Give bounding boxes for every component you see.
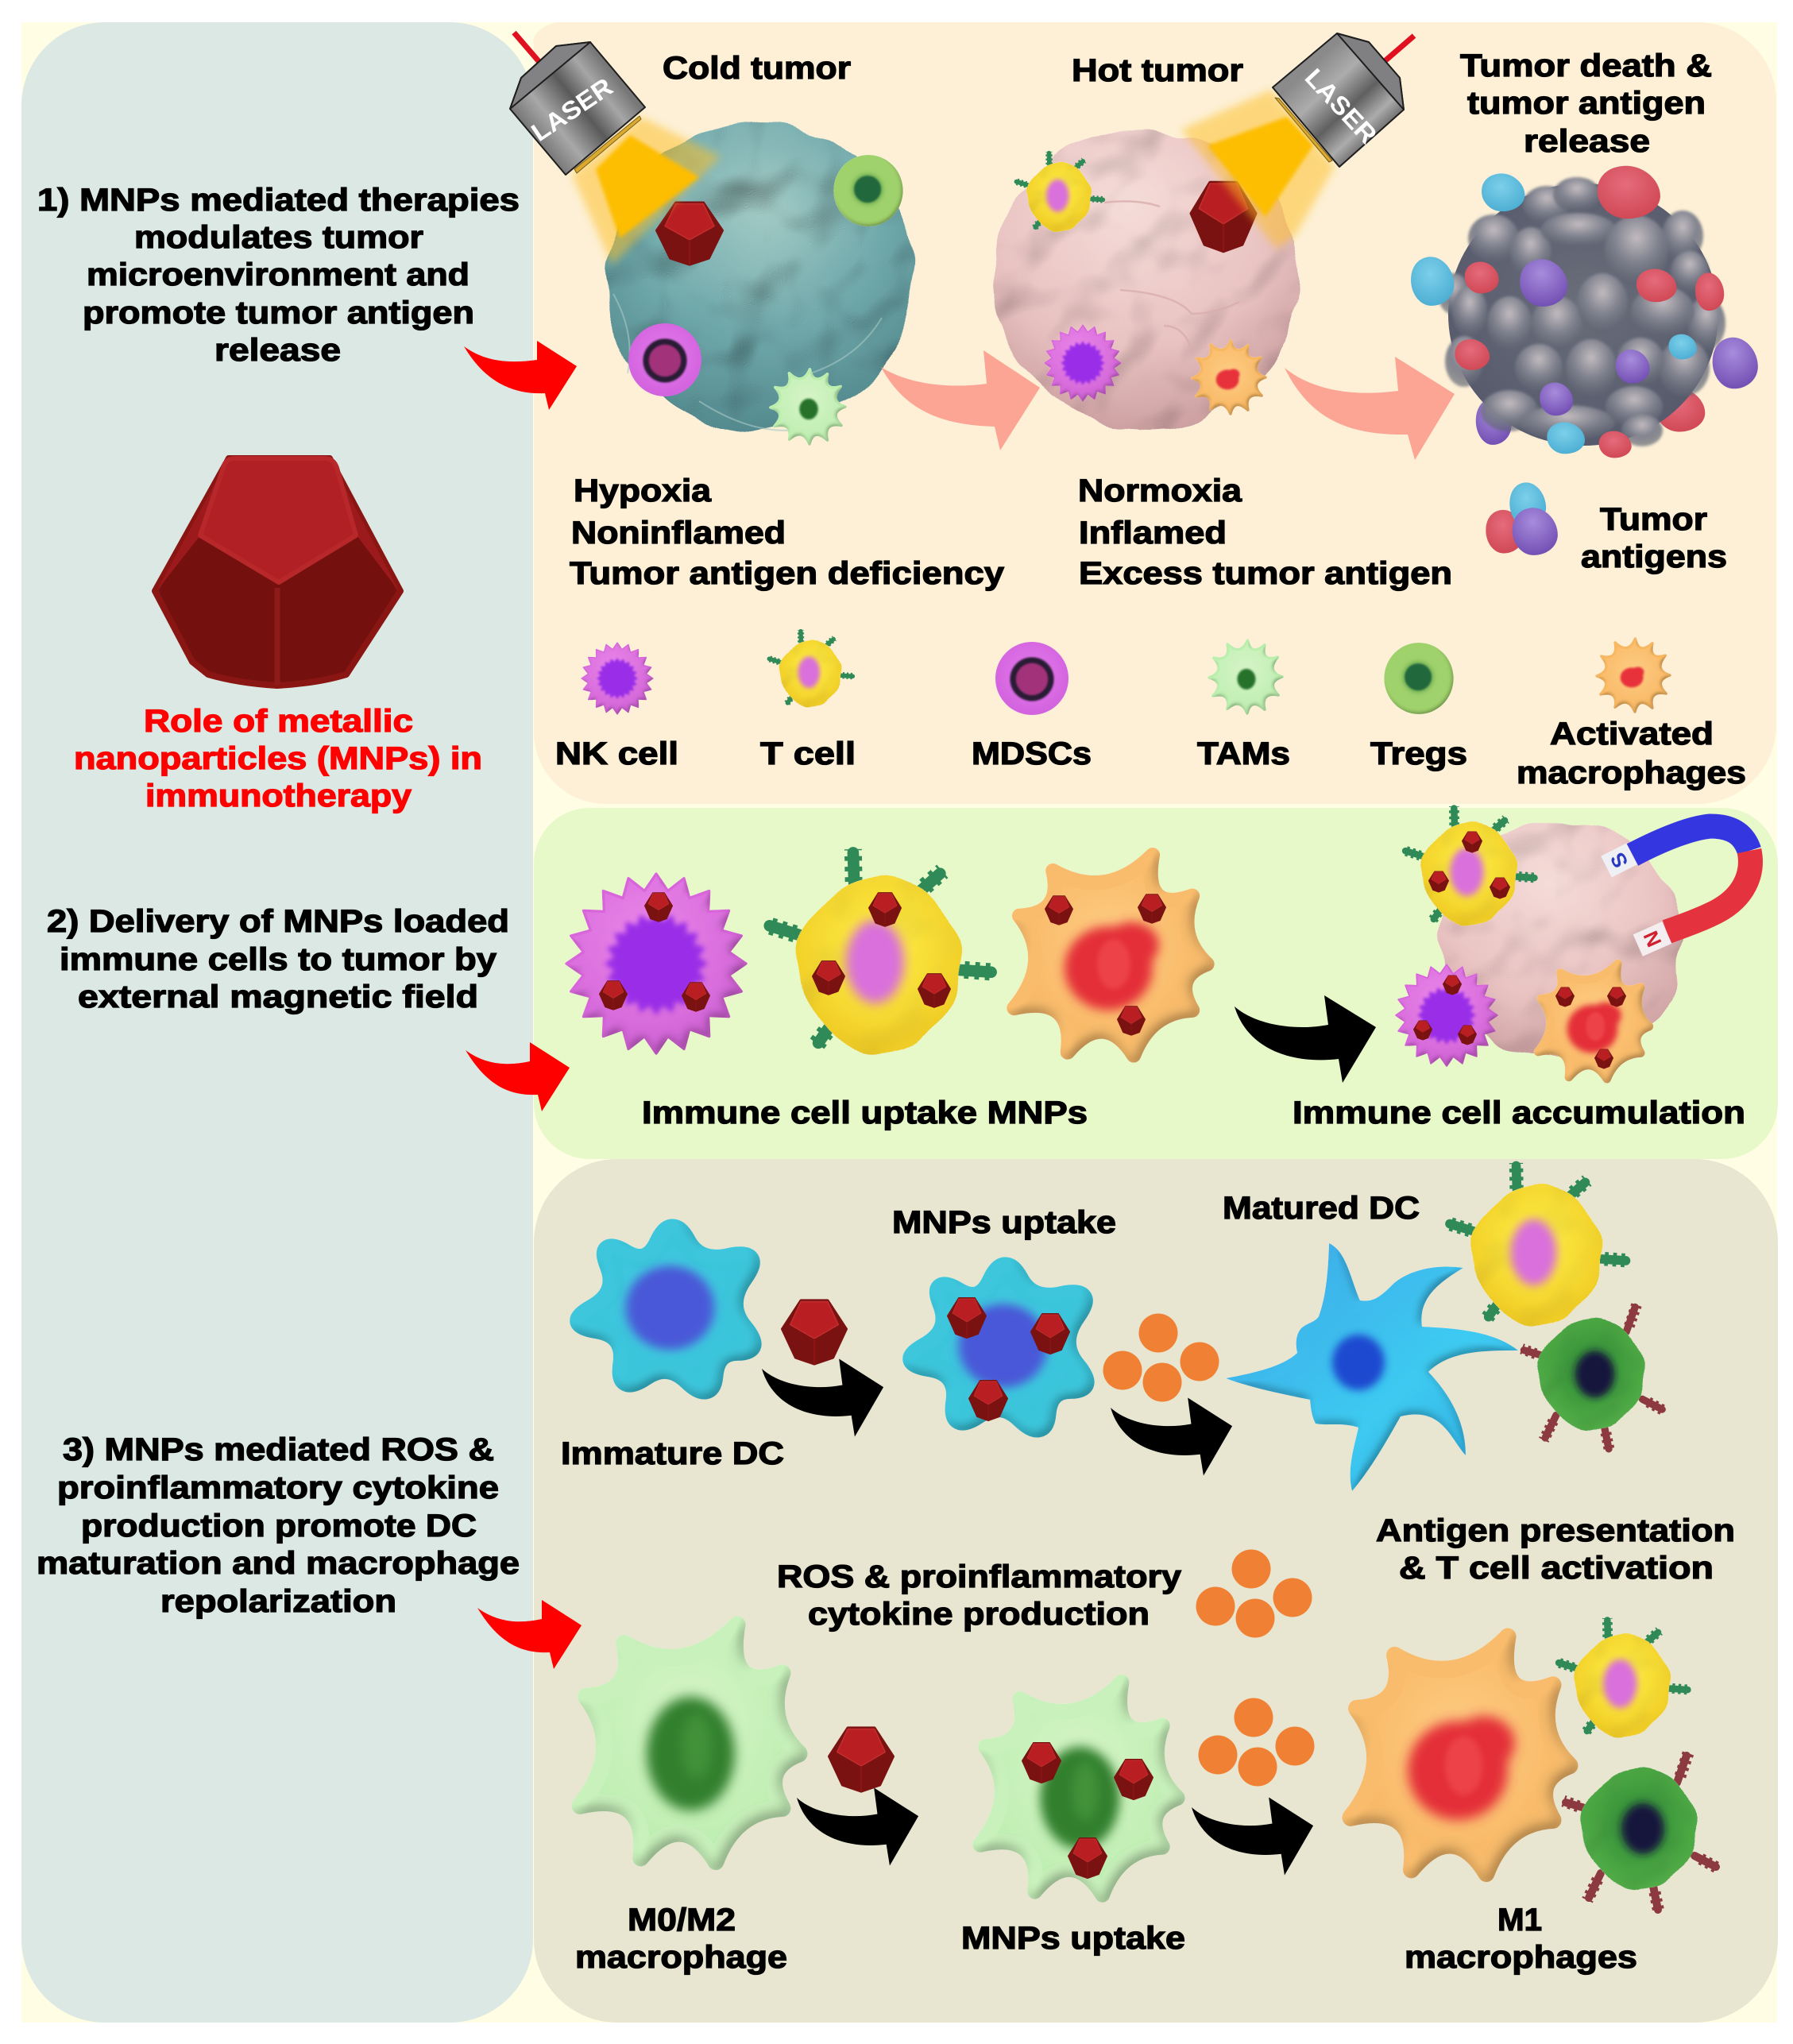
label: matured DC: Matured DC [1223,1191,1420,1226]
cell: immature DC [581,1229,751,1389]
label: M1 macrophages: M1 [1497,1903,1542,1938]
title: role of MNPs [74,704,482,813]
text: hot tumor properties: Normoxia [1078,473,1242,508]
icon: TAM on cold tumor [771,369,845,444]
text: step 3: 3) MNPs mediated ROS & [63,1432,494,1467]
icon: NK cell on hot tumor [1045,325,1121,401]
beam: laser on cold tumor [572,117,721,265]
text: step 1: microenvironment and [87,257,470,292]
label: immune cell accumulation: Immune cell accumulation [1293,1095,1745,1130]
icon: activated macrophage on hot tumor [1192,341,1266,414]
legend: TAMs: TAMs [1197,736,1290,771]
legend: MDSCs [972,642,1092,771]
label: M1 macrophages: macrophages [1405,1940,1637,1975]
tumor: cold tumor [605,124,916,431]
text: cold tumor properties: Noninflamed [571,516,786,551]
icon: MDSC on cold tumor [628,323,701,396]
heading: hot tumor: Hot tumor [1072,53,1243,88]
heading: tumor death: tumor antigen [1467,86,1706,121]
panel: left column [21,22,533,2023]
text: step 3: production promote DC [81,1509,477,1544]
heading: cold tumor: Cold tumor [663,51,851,86]
cell: macrophage with nanoparticles lower [980,1683,1177,1895]
arrow: red, step 1 [464,341,577,410]
text: step 3: repolarization [160,1584,396,1619]
label: MNPs uptake upper: MNPs uptake [892,1205,1116,1240]
cell: T cell near M1 [1557,1618,1690,1737]
legend: tumor antigens label: Tumor [1600,502,1707,537]
icon: laser right [1273,33,1414,167]
label: immature DC: Immature DC [561,1436,784,1471]
arrow: pink hot to death [1285,357,1455,460]
icon: laser left [510,33,645,175]
icon: magnet: S [1606,848,1633,872]
title: role of MNPs: immunotherapy [145,779,412,813]
cell: T cell near matured DC [1447,1163,1629,1325]
icon: cytokines macrophage row [1198,1698,1314,1786]
cell: NK with nanoparticles [566,874,746,1053]
icon: laser left: LASER [526,72,618,147]
label: ROS and cytokine production [777,1559,1182,1632]
legend: Tregs: Tregs [1370,736,1467,771]
text: step 1: 1) MNPs mediated therapies [37,183,520,218]
icon: Treg on cold tumor [833,155,903,226]
heading: tumor death: Tumor death & [1460,48,1712,83]
text: hot tumor properties: Inflamed [1079,516,1227,551]
cell: T cell with nanoparticles [766,849,995,1053]
legend: activated macrophages: macrophages [1517,755,1746,790]
cell: accumulated NK [1396,964,1497,1066]
arrow: black macrophage 2 [1192,1798,1313,1875]
heading: tumor death: release [1524,124,1650,159]
icon: nanoparticle DC row [783,1300,846,1364]
text: hot tumor properties [1078,473,1452,591]
panel: DC maturation and macrophage repolarization [534,1159,1778,2023]
cell: M1 macrophage [1351,1636,1570,1873]
icon: cytokines legend [1196,1549,1312,1638]
legend: tumor antigens label: antigens [1581,539,1727,574]
legend: Tregs [1370,643,1467,771]
cell: M0/M2 macrophage [580,1625,799,1861]
cell: DC with nanoparticles [914,1267,1084,1428]
legend: NK cell: NK cell [555,736,678,771]
legend: T cell: T cell [760,736,856,771]
label: antigen presentation [1376,1513,1735,1586]
label: immune cell uptake: Immune cell uptake MNPs [642,1095,1088,1130]
text: cold tumor properties: Tumor antigen deficiency [570,556,1005,591]
tumor: hot tumor [993,129,1298,430]
label: M0/M2 macrophage [575,1903,787,1975]
legend: activated macrophages [1517,639,1746,790]
icon: nanoparticle on cold tumor [657,203,722,265]
icon: T cell on hot tumor [1015,152,1104,231]
legend: T cell [760,630,856,771]
text: step 3 [37,1432,520,1619]
text: step 1: release [214,333,341,368]
panel: immune cell delivery [534,808,1778,1159]
label: antigen presentation: & T cell activation [1399,1551,1714,1586]
text: step 2: 2) Delivery of MNPs loaded [47,904,509,939]
cell: activated T cell near matured DC [1522,1305,1664,1451]
arrow: black DC 2 [1111,1398,1232,1475]
label: MNPs uptake lower: MNPs uptake [961,1921,1185,1956]
cell: activated T cell near M1 [1563,1753,1718,1912]
label: M1 macrophages [1405,1903,1637,1975]
cell: accumulated T cell [1404,806,1536,925]
text: step 2: external magnetic field [78,979,478,1014]
legend: NK cell [555,643,678,771]
legend: TAMs [1197,640,1290,771]
title: role of MNPs: nanoparticles (MNPs) in [74,741,482,776]
arrow: red, step 3 [477,1600,582,1669]
label: M0/M2 macrophage: macrophage [575,1940,787,1975]
icon: cytokines DC row [1103,1314,1219,1401]
text: step 2: immune cells to tumor by [60,942,497,977]
legend: MDSCs: MDSCs [972,736,1092,771]
heading: tumor death [1460,48,1712,159]
legend: tumor antigens label [1581,502,1727,574]
text: step 3: maturation and macrophage [37,1546,520,1581]
title: role of MNPs: Role of metallic [144,704,413,739]
cell: accumulated macrophage [1538,964,1649,1079]
icon: nanoparticle macrophage row [829,1728,893,1791]
tumor: pink tumor with magnet [1439,821,1683,1060]
text: cold tumor properties: Hypoxia [574,473,712,508]
legend: activated macrophages: Activated [1550,717,1714,752]
text: cold tumor properties [570,473,1005,591]
cell: macrophage with nanoparticles [1014,855,1207,1055]
cell: matured DC [1226,1243,1518,1491]
arrow: red, step 2 [466,1042,570,1111]
text: step 1 [37,183,520,368]
icon: large metallic nanoparticle [155,458,400,686]
arrow: pink cold to hot [881,350,1040,450]
panel: tumor microenvironment [533,22,1776,804]
arrow: black to accumulation [1235,995,1376,1083]
text: step 3: proinflammatory cytokine [57,1470,499,1505]
tumor: dying tumor with antigens [1411,166,1758,458]
label: M0/M2 macrophage: M0/M2 [628,1903,736,1938]
label: ROS and cytokine production: ROS & proinflammatory [777,1559,1182,1594]
text: hot tumor properties: Excess tumor antigen [1079,556,1452,591]
icon: laser right: LASER [1300,63,1382,149]
beam: laser on hot tumor [1181,90,1335,249]
text: step 1: promote tumor antigen [83,296,474,330]
arrow: black macrophage 1 [797,1788,918,1865]
icon: nanoparticle on hot tumor [1191,183,1256,251]
text: step 1: modulates tumor [134,220,423,255]
text: step 2 [47,904,509,1014]
label: antigen presentation: Antigen presentation [1376,1513,1735,1548]
label: ROS and cytokine production: cytokine production [808,1597,1150,1632]
icon: magnet [1601,826,1750,956]
arrow: black DC 1 [762,1359,883,1436]
icon: magnet: N [1638,927,1667,951]
legend: tumor antigens icon [1486,482,1558,555]
